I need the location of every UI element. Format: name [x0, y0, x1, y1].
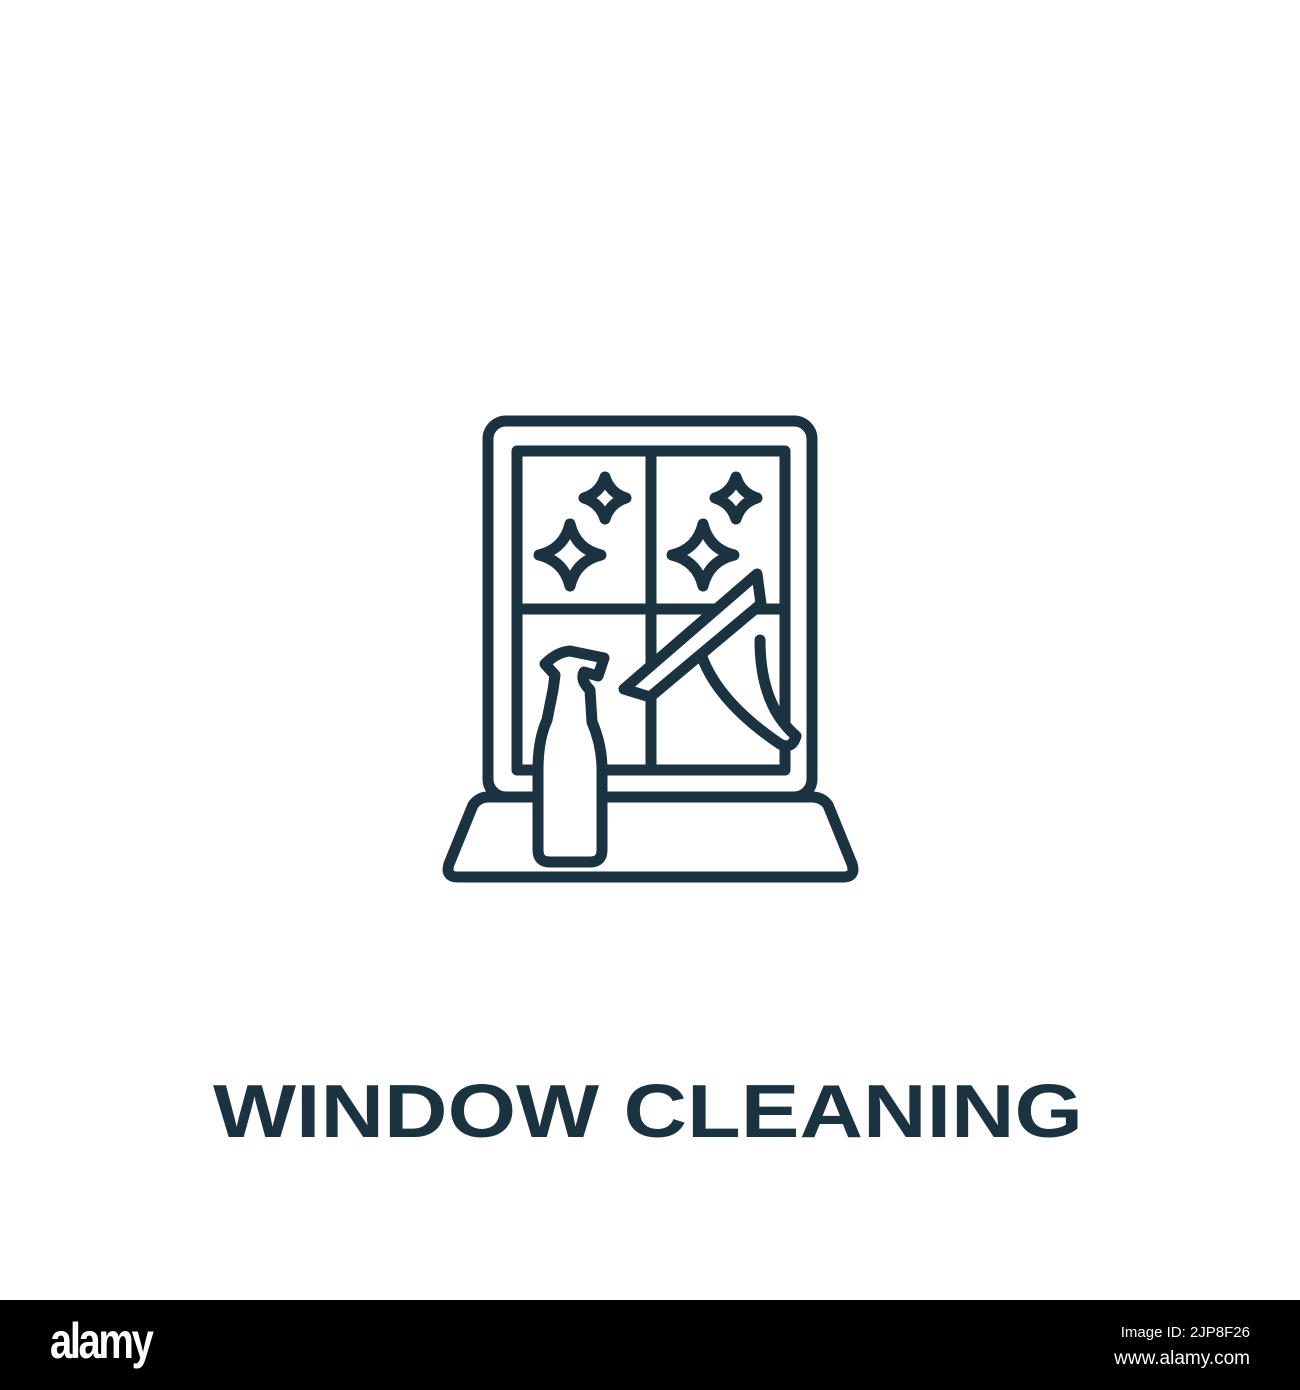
footer bar — [0, 1300, 1300, 1390]
image id — [1114, 1324, 1250, 1369]
logo: alamy — [50, 1313, 151, 1369]
image id: Image ID: 2JP8F26 — [1121, 1324, 1250, 1341]
inner window panes — [517, 451, 785, 770]
icon: sparkles — [539, 477, 757, 586]
image id: www.alamy.com — [1114, 1348, 1250, 1369]
title: WINDOW CLEANING — [213, 1069, 1083, 1153]
icon: spray bottle — [538, 651, 604, 862]
icon: squeegee — [624, 574, 796, 746]
outer window frame — [488, 421, 812, 797]
sill — [448, 797, 853, 877]
